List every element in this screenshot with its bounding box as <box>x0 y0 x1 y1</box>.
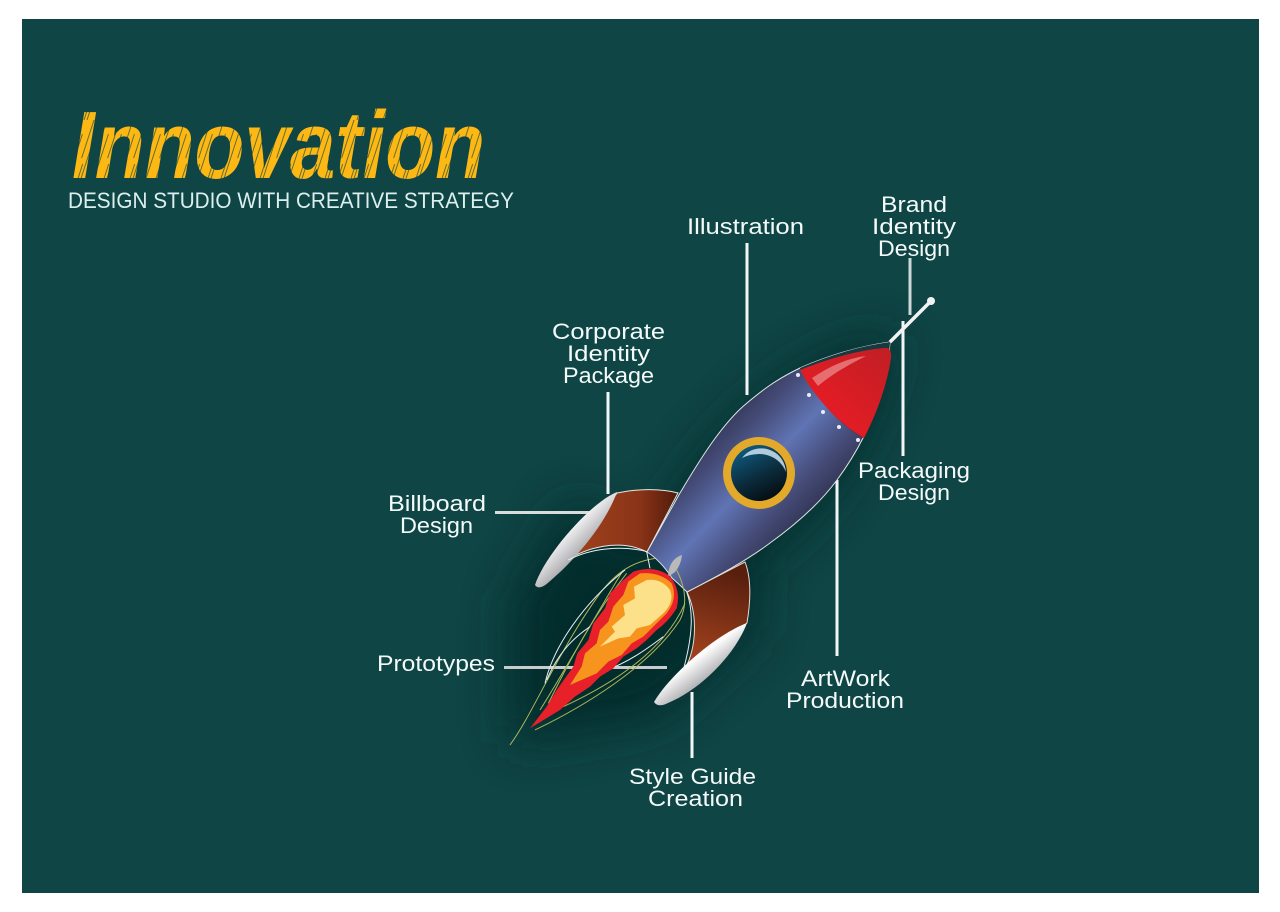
label: Billboard Design: Billboard <box>388 491 486 516</box>
label: Brand Identity Design: Identity <box>872 214 956 239</box>
label: Brand Identity Design: Design <box>878 236 950 261</box>
label: Corporate Identity Package: Identity <box>567 341 650 366</box>
lower fin blade <box>654 623 747 705</box>
label: Packaging Design <box>858 458 970 505</box>
rocket illustration <box>510 297 935 745</box>
nozzle spike <box>668 555 682 577</box>
upper fin <box>568 490 678 560</box>
nose highlight <box>812 356 866 386</box>
label: Style Guide Creation <box>629 764 756 811</box>
title: Innovation <box>72 92 485 199</box>
flame <box>530 569 678 728</box>
subtitle: DESIGN STUDIO WITH CREATIVE STRATEGY <box>68 188 514 213</box>
label: Corporate Identity Package: Package <box>563 363 654 388</box>
lower fin <box>683 562 750 672</box>
label: Packaging Design: Design <box>878 480 950 505</box>
upper fin blade <box>535 492 617 587</box>
label: Brand Identity Design <box>872 192 956 261</box>
label: Billboard Design <box>388 491 486 538</box>
leader lines <box>495 243 910 758</box>
title block <box>68 92 514 213</box>
porthole window <box>723 437 795 509</box>
rocket body <box>647 342 890 592</box>
label: Corporate Identity Package <box>552 319 665 388</box>
flame wisps <box>510 548 691 745</box>
antenna <box>890 297 935 342</box>
label: Illustration: Illustration <box>687 214 804 239</box>
rivets <box>796 373 860 442</box>
rocket nose cone <box>800 342 891 438</box>
label: ArtWork Production: Production <box>786 688 904 713</box>
label: ArtWork Production: ArtWork <box>801 666 891 691</box>
label: Billboard Design: Design <box>400 513 473 538</box>
label: Corporate Identity Package: Corporate <box>552 319 665 344</box>
label: ArtWork Production <box>786 666 904 713</box>
labels <box>377 192 970 811</box>
label: Style Guide Creation: Style Guide <box>629 764 756 789</box>
label: Packaging Design: Packaging <box>858 458 970 483</box>
label: Prototypes: Prototypes <box>377 651 495 676</box>
label: Style Guide Creation: Creation <box>648 786 743 811</box>
dark glow behind rocket <box>510 335 895 745</box>
label: Brand Identity Design: Brand <box>881 192 947 217</box>
